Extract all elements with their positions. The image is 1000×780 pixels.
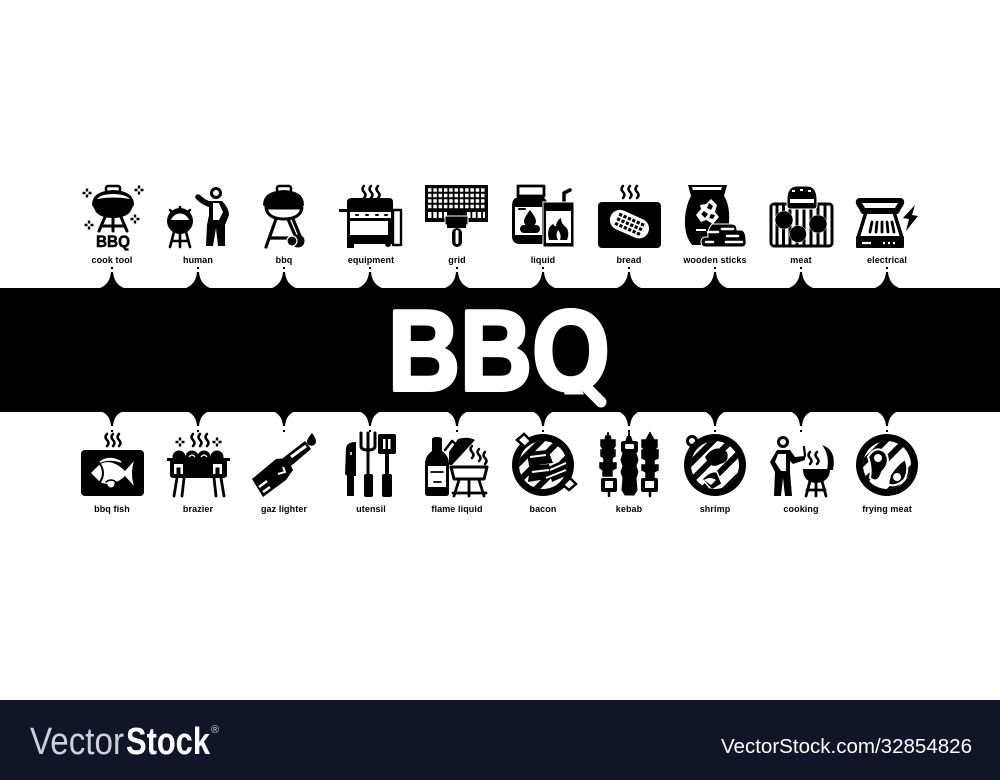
icon: gaz lighter — [252, 433, 316, 497]
icon: equipment — [339, 186, 401, 248]
icon: liquid — [512, 186, 574, 247]
icon: bread — [598, 186, 661, 248]
footer image id: VectorStock.com/32854826 — [721, 736, 972, 758]
label: grid: grid — [448, 255, 466, 265]
icon: kebab — [600, 433, 658, 496]
label: kebab: kebab — [616, 504, 643, 514]
footer logo: Vector — [30, 721, 124, 763]
icon: shrimp — [684, 434, 746, 496]
footer logo: Stock — [126, 721, 211, 763]
icon: frying meat — [856, 434, 918, 496]
bottom connectors — [100, 411, 899, 432]
icon: flame liquid — [425, 437, 487, 496]
footer logo — [30, 721, 219, 763]
label: meat: meat — [790, 255, 812, 265]
icon: utensil — [345, 433, 396, 497]
label: gaz lighter: gaz lighter — [261, 504, 307, 514]
icon: grid — [425, 185, 488, 247]
label: frying meat: frying meat — [862, 504, 912, 514]
label: wooden sticks: wooden sticks — [682, 255, 747, 265]
label: electrical: electrical — [867, 255, 907, 265]
footer bar — [0, 700, 1000, 780]
label: bbq fish: bbq fish — [94, 504, 130, 514]
label: cook tool: cook tool — [92, 255, 132, 265]
label: shrimp: shrimp — [700, 504, 731, 514]
icon: brazier — [167, 434, 230, 496]
label: bread: bread — [616, 255, 642, 265]
label: bbq: bbq — [276, 255, 292, 265]
label: brazier: brazier — [183, 504, 214, 514]
icon: wooden sticks — [685, 185, 746, 247]
label: equipment: equipment — [348, 255, 394, 265]
label: utensil: utensil — [356, 504, 386, 514]
footer logo: ® — [211, 724, 219, 736]
icon: cook tool — [82, 186, 144, 251]
icon: meat — [771, 186, 832, 246]
icon: bbq — [263, 186, 304, 248]
label: cooking: cooking — [783, 504, 819, 514]
title: BBQ — [388, 287, 610, 414]
icon: cooking — [770, 438, 834, 496]
icon: electrical — [856, 198, 918, 248]
icon: bacon — [512, 432, 578, 496]
icon: bbq fish — [81, 434, 144, 496]
label: flame liquid: flame liquid — [431, 504, 483, 514]
icon: cook tool: BBQ — [96, 232, 130, 251]
icon: human — [167, 188, 229, 247]
label: bacon: bacon — [529, 504, 557, 514]
central black band — [0, 288, 1000, 412]
label: human: human — [183, 255, 213, 265]
label: liquid: liquid — [531, 255, 555, 265]
top connectors — [100, 267, 899, 288]
